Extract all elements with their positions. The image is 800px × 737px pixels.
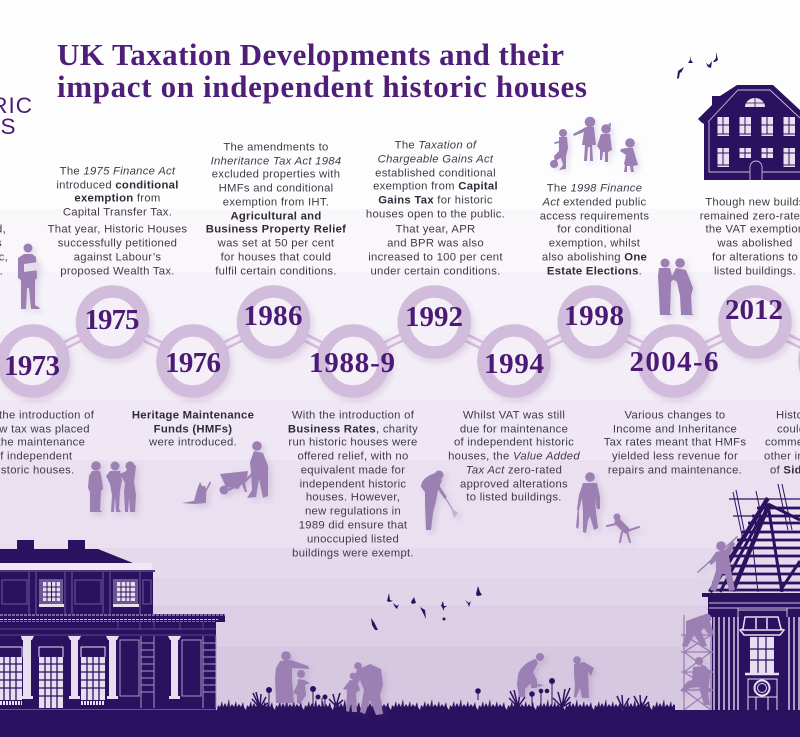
text: 1988-9: independent historic [300,478,406,490]
text: 2004-6: yielded less revenue for [612,450,738,462]
icon: children playing [550,117,638,172]
icon: adult with toddler [343,662,383,715]
chimneys [5,535,98,552]
grass [217,696,675,710]
year labels: 1986 [244,300,302,332]
text: 1986: Inheritance Tax Act 1984 [211,156,341,168]
text: 2004-6: Tax rates meant that HMFs [604,436,746,448]
cornice [0,614,225,622]
text: 2004-6: Income and Inheritance [613,424,737,436]
text: 1986: for houses that could [221,252,331,264]
year labels: 1994 [484,348,544,380]
year labels: 1992 [405,301,463,333]
year labels: 1988-9 [309,347,395,379]
text: 1975: That year, Historic Houses [48,224,187,236]
text: 1998: access requirements [540,210,649,222]
text: 1994: Tax Act zero-rated [466,464,562,476]
text: 1975: exemption from [74,192,161,204]
text: 1998: The 1998 Finance [547,182,642,194]
text: 1994: approved alterations [460,478,568,490]
text: 1994: to listed buildings. [466,492,562,504]
text: 1992: and BPR was also [387,238,484,250]
text: 2004-6: repairs and maintenance. [608,464,742,476]
year labels: 1975 [84,304,140,336]
ground [0,710,800,737]
icon: worker on scaffold [682,614,714,647]
plants and flowers [252,678,649,709]
text: 1976: were introduced. [148,436,237,448]
illustration: scaffold [681,615,713,710]
text: 1988-9: new regulations in [305,506,401,518]
text: 1998: for conditional [557,224,632,236]
text: 1988-9: 1989 did ensure that [299,520,408,532]
text: 1988-9: run historic houses were [288,436,418,448]
icon: birds middle [371,586,482,630]
text: 1998: Act extended public [542,196,647,208]
text: 1992: exemption from Capital [373,180,498,192]
columns [21,636,181,699]
text: 1994: Whilst VAT was still [463,410,565,422]
year labels: 2004-6 [630,346,718,378]
title: impact on independent historic houses [57,69,587,104]
text: 2012: was abolished [716,238,793,250]
illustration: mansion left [0,535,225,710]
icon: man with rake [421,470,458,530]
icon: group of three people [88,461,136,512]
walls and entablature [702,593,800,597]
year labels: 1998 [564,300,624,332]
text: 1975: introduced conditional [56,180,179,192]
text: 1988-9: With the introduction of [292,410,415,422]
text: 1988-9: buildings were exempt. [292,548,414,560]
text: 1988-9: equivalent made for [301,464,405,476]
text: 1998 [540,182,649,278]
text: 1972 fragment [0,224,8,278]
text: 1976: Heritage Maintenance [132,410,254,422]
text: 1986: Agricultural and [230,210,322,222]
text: 1975: against Labour’s [74,252,161,264]
text: 1988-9 [288,410,418,560]
timeline rings [2,292,800,392]
text: 1988-9: Business Rates, charity [288,424,418,436]
text: 1986: fulfil certain conditions. [215,266,337,278]
text: 1986 [206,142,346,278]
icon: man with document [18,244,40,309]
text: 1994: houses, the Value Added [448,450,580,462]
text: 1992 [366,140,505,278]
text: 2004-6 [604,410,746,476]
timeline connectors [33,322,800,361]
text: 1992: under certain conditions. [370,266,501,278]
illustration: house top right [698,85,800,180]
year labels [4,294,783,382]
year labels: 1973 [4,350,60,382]
text: 1994: of independent historic [454,436,574,448]
text: 1988-9: offered relief, with no [297,450,409,462]
title: UK Taxation Developments and their [57,37,564,72]
logo fragment [0,93,33,139]
text: 1988-9: unoccupied listed [307,534,399,546]
illustration: house under repair right [702,484,800,710]
text: 1992: That year, APR [396,224,475,236]
text: 2012 [700,196,800,278]
icon: gardener with watering can [517,653,544,697]
text: 1998: also abolishing One [542,252,647,264]
upper storey panels and windows [2,572,151,614]
text: 2012: listed buildings. [714,266,796,278]
ornate window [740,617,784,710]
text: 1992: houses open to the public. [366,208,505,220]
fluted columns [714,617,799,710]
year labels: 1976 [165,347,221,379]
text: final entry [764,410,800,476]
title [57,37,587,104]
french windows [0,647,105,708]
text: 1986: HMFs and conditional [219,182,333,194]
icon: worker on roof [697,536,738,591]
roof framing [710,484,800,592]
text: 1975 [48,166,187,278]
rusticated piers and blind panels [0,636,216,710]
text: 1998: Estate Elections. [547,266,642,278]
icon: adult dancing with child [275,651,310,704]
text: 1975: The 1975 Finance Act [60,166,176,178]
text: 2004-6: Various changes to [625,410,725,422]
text: 1975: Capital Transfer Tax. [63,206,172,218]
text: 1976: Funds (HMFs) [154,424,232,436]
text: 1992: increased to 100 per cent [368,252,503,264]
text: 1998: exemption, whilst [549,238,641,250]
text: 1992: Gains Tax for historic [378,194,493,206]
text: 1994 [448,410,580,504]
text: 1992: Chargeable Gains Act [378,154,494,166]
text: 1988-9: houses. However, [306,492,400,504]
text: 1975: successfully petitioned [58,238,177,250]
text: 1976 [132,410,254,448]
text: 1975: proposed Wealth Tax. [60,266,175,278]
icon: two men talking [658,258,694,315]
icon: man with wheelbarrow and cat [182,441,268,504]
text: 1994: due for maintenance [460,424,568,436]
icon: man with dog [576,472,639,542]
icon: gardener digging [573,656,594,698]
text: 1986: excluded properties with [212,168,340,180]
text: 1973 [0,410,95,476]
year labels: 2012 [725,294,783,326]
text: 2012: for alterations to [712,252,798,264]
icon: birds top [677,52,718,79]
text: 1986: The amendments to [223,142,329,154]
text: 1986: exemption from IHT. [223,196,329,208]
text: 1986: Business Property Relief [206,224,346,236]
icon: seated worker on scaffold [680,657,710,705]
text: 1992: established conditional [375,168,496,180]
text: 1992: The Taxation of [395,140,478,152]
text: 1986: was set at 50 per cent [217,238,335,250]
